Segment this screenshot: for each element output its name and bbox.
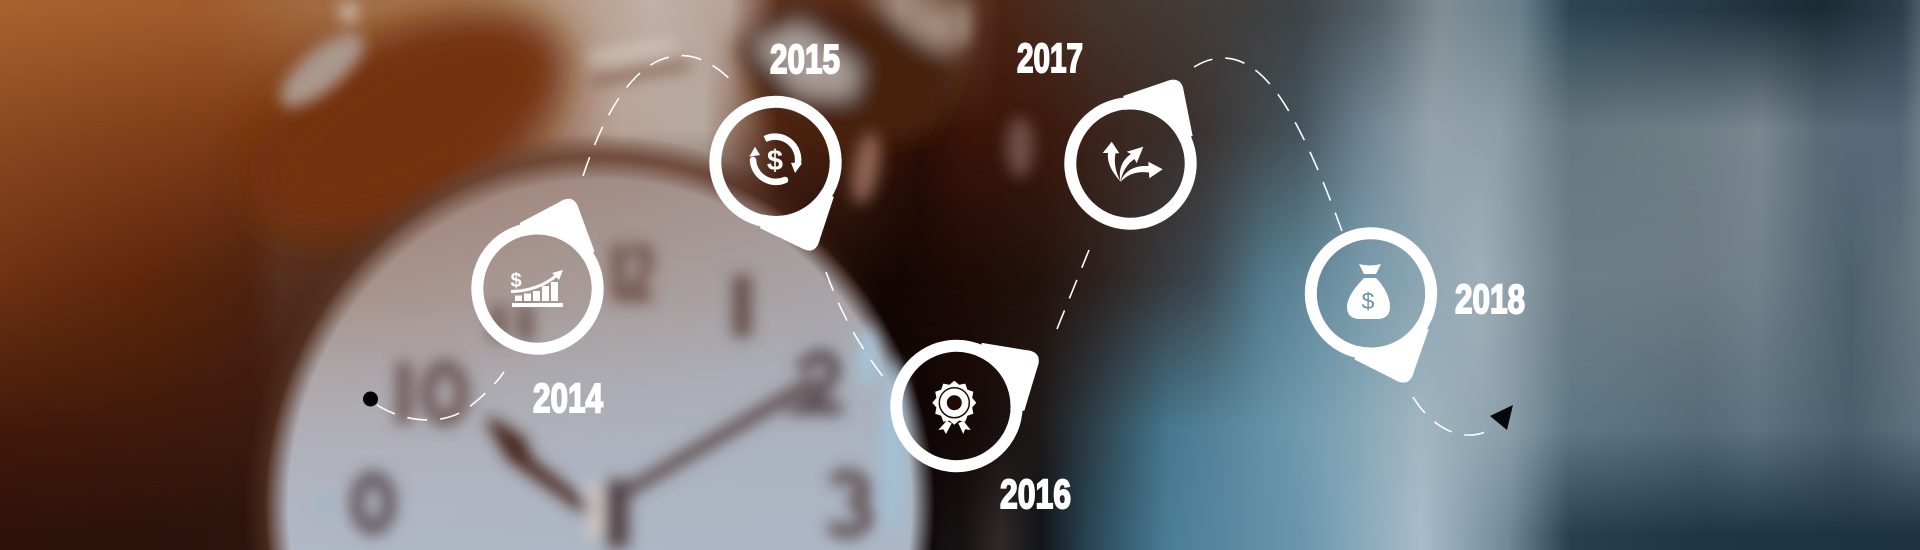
pin 2017 [1017, 35, 1230, 246]
icon: money bag [1347, 264, 1390, 319]
label 2018: 2018 [1455, 276, 1525, 322]
icon: money bag: $ [1362, 288, 1375, 314]
icon: diverging arrows [1103, 142, 1163, 182]
label 2016: 2016 [1000, 471, 1071, 517]
icon: dollar cycle [749, 137, 802, 182]
start dot [363, 392, 378, 406]
pin 2018 [1293, 215, 1525, 405]
clock hands [484, 416, 600, 518]
icon: growth chart [510, 270, 563, 307]
clock rim [252, 136, 945, 550]
pin 2015 [697, 36, 868, 273]
pin 2016 [874, 304, 1071, 517]
pin 2014 [460, 178, 628, 421]
bell [215, 0, 601, 278]
label 2017: 2017 [1017, 35, 1083, 81]
dial numerals [612, 244, 625, 300]
end arrowhead [1490, 405, 1513, 430]
clock face [266, 158, 934, 550]
dashed timeline path [377, 56, 1490, 435]
icon: dollar cycle: $ [767, 145, 783, 177]
label 2015: 2015 [770, 36, 840, 82]
icon: award badge [932, 381, 976, 434]
icon: growth chart: $ [510, 270, 522, 292]
second bell frame [735, 8, 960, 150]
label 2014: 2014 [533, 375, 603, 421]
